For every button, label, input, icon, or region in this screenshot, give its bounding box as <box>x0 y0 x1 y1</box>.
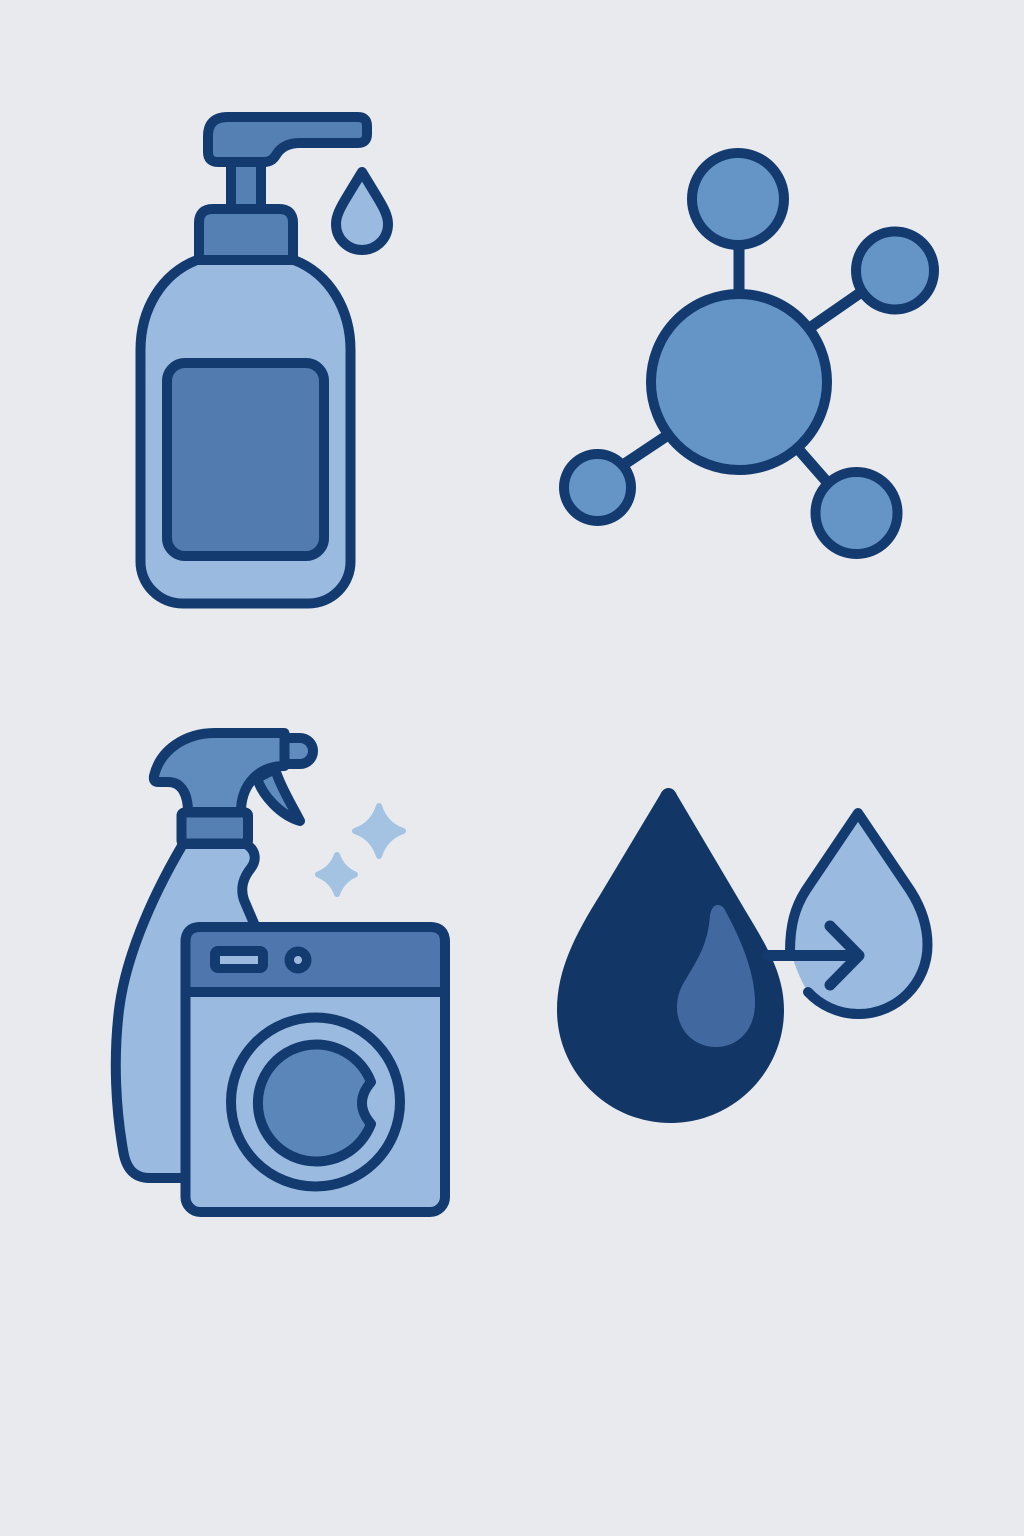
arrow <box>768 926 859 985</box>
icon: water drops with arrow <box>557 788 928 1123</box>
washing machine body <box>186 927 445 1212</box>
spray trigger <box>257 769 300 821</box>
light drop outline <box>790 813 928 1014</box>
bottle label <box>167 363 324 556</box>
pump neck <box>231 160 261 210</box>
inner drop <box>677 905 755 1047</box>
spray head <box>154 733 284 812</box>
central atom <box>651 294 827 470</box>
display <box>210 946 268 973</box>
icon: spray bottle and washing machine <box>116 733 445 1212</box>
dark drop <box>557 788 784 1123</box>
molecule bonds <box>623 245 860 482</box>
bottle collar <box>199 209 293 260</box>
sparkle large <box>355 806 403 856</box>
light drop <box>790 813 928 1014</box>
spray bottle body <box>116 844 256 1178</box>
washing machine control panel <box>186 927 445 992</box>
icon: pump bottle <box>140 117 388 604</box>
inner door <box>258 1044 371 1162</box>
lower left atom <box>564 454 631 521</box>
spray nozzle <box>284 738 313 764</box>
pump head <box>208 117 367 162</box>
spray collar <box>182 812 248 844</box>
sparkle small <box>318 855 355 894</box>
droplet <box>336 172 388 250</box>
icon: molecule <box>564 153 934 554</box>
lower right atom <box>816 472 898 554</box>
knob <box>284 946 312 974</box>
top atom <box>692 153 784 245</box>
right atom <box>856 232 934 310</box>
bottle body <box>140 260 351 604</box>
outer door <box>231 1018 400 1186</box>
